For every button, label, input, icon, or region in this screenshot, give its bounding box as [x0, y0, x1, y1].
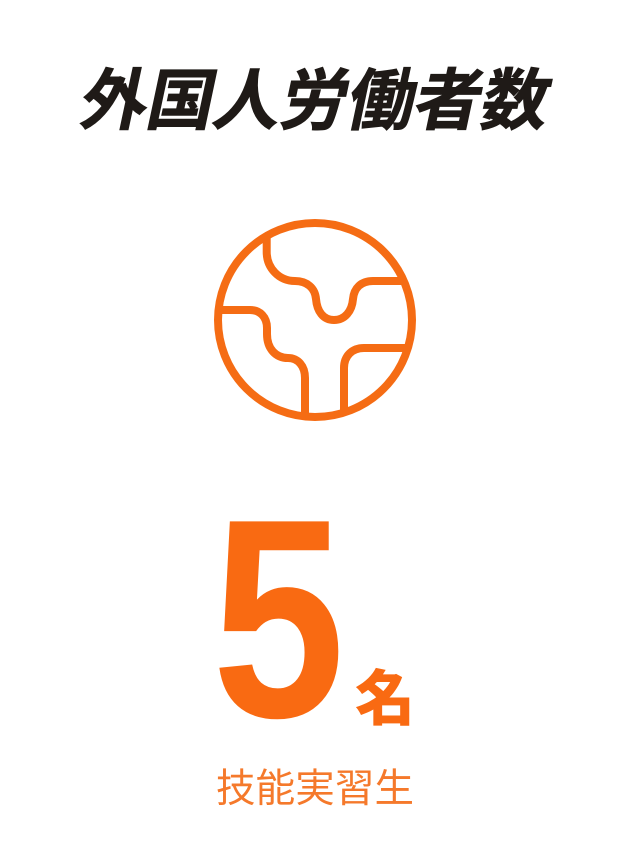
title: 外国人労働者数 [74, 65, 558, 139]
icon: globe [218, 223, 412, 417]
label: 技能実習生: 技能実習生 [216, 767, 414, 811]
big number 5: 5 [212, 460, 345, 777]
unit: 名: 名 [355, 666, 415, 733]
